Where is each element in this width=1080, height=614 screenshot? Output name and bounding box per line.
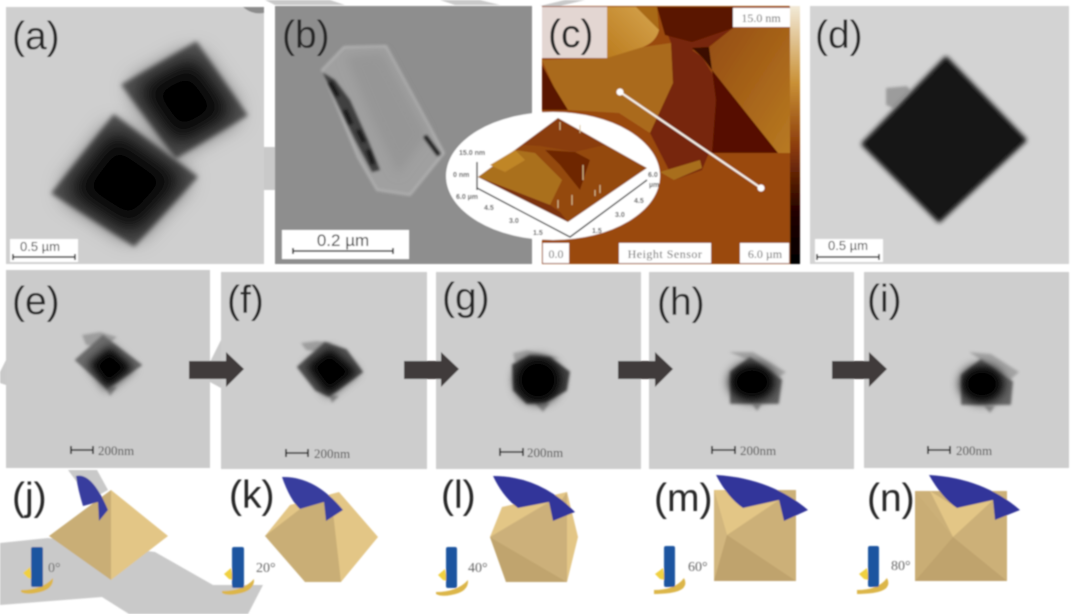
rotation icon k: [222, 547, 254, 595]
inset: 3D AFM surface: [446, 112, 660, 240]
scale bar f: [286, 446, 350, 461]
bottom label height sensor: [619, 243, 711, 263]
label a: (a): [12, 15, 60, 58]
scale bar i: 200nm: [956, 443, 992, 458]
scale bar g: [500, 445, 563, 460]
label k: (k): [229, 474, 274, 517]
arrow f to g: [404, 352, 459, 387]
label n: (n): [867, 477, 915, 520]
arrow g to h: [618, 352, 673, 387]
scale bar h: 200nm: [740, 443, 776, 458]
inset axis labels: 6.0: [648, 172, 658, 179]
inset axis labels: µm: [649, 182, 659, 189]
angle m: 60°: [688, 560, 708, 575]
angle n: 80°: [891, 559, 911, 574]
scale bar e: [71, 443, 134, 458]
label c: (c): [548, 13, 593, 56]
label b: (b): [282, 14, 330, 57]
scale bar a: [10, 239, 78, 262]
inset axes: [477, 162, 647, 237]
label m: (m): [654, 477, 712, 520]
inset axis labels: 4.5: [634, 198, 644, 205]
panel d: TEM of single particle: [810, 6, 1069, 264]
bottom label 0.0: 0.0: [548, 247, 564, 261]
rotation icon n: [857, 546, 888, 594]
inset axis labels: 3.0: [615, 212, 625, 219]
inset axis labels: 0 nm: [453, 172, 469, 179]
panel k: model 20 degrees: [222, 474, 378, 595]
panel f: TEM tilt 20: [221, 272, 427, 469]
inset axis labels: 15.0 nm: [459, 150, 485, 157]
inset axis labels: 3.0: [509, 218, 519, 225]
scale bar e: 200nm: [98, 443, 134, 458]
angle l: 40°: [468, 561, 488, 576]
background: gray watermark shapes: [0, 0, 585, 614]
inset axis labels: 6.0 µm: [456, 194, 478, 201]
panel g: TEM tilt 40: [436, 272, 641, 469]
label g: (g): [442, 276, 490, 319]
rotation icon l: [436, 547, 468, 596]
panel l: model 40 degrees: [436, 474, 578, 596]
arrow h to i: [832, 352, 887, 387]
panel n: model 80 degrees: [857, 475, 1020, 594]
bottom label 6.0 um: [740, 243, 789, 263]
scale bar b: [282, 230, 409, 259]
panel c: AFM height map: [542, 6, 800, 264]
scale bar f: 200nm: [314, 446, 350, 461]
scale bar d: 0.5 µm: [828, 238, 868, 253]
label d: (d): [815, 14, 863, 57]
inset axis labels: 4.5: [484, 205, 494, 212]
angle j: 0°: [48, 561, 61, 576]
label e: (e): [12, 280, 60, 323]
panel e: TEM tilt 0: [6, 270, 210, 468]
bottom label 6.0 um: 6.0 µm: [748, 247, 783, 261]
inset axis labels: 1.5: [592, 228, 602, 235]
scale bar i: [928, 443, 992, 458]
scale bar d: [815, 238, 883, 262]
panel a: TEM of two particles: [6, 7, 264, 264]
panel m: model 60 degrees: [654, 475, 808, 594]
height scale label: [733, 8, 790, 27]
scale bar h: [712, 443, 776, 458]
profile line: [616, 88, 764, 192]
label f: (f): [227, 279, 264, 322]
panel j: model 0 degrees: [12, 476, 168, 594]
label c: [542, 7, 607, 58]
scale bar g: 200nm: [527, 445, 563, 460]
angle k: 20°: [256, 561, 276, 576]
label j: (j): [12, 476, 47, 519]
arrow e to f: [189, 352, 244, 387]
scale bar b: 0.2 µm: [317, 231, 369, 250]
colour scale: [790, 6, 800, 264]
scale bar a: 0.5 µm: [20, 239, 60, 254]
label l: (l): [441, 474, 476, 517]
label h: (h): [657, 281, 705, 324]
inset axis labels: 1.5: [533, 230, 543, 237]
rotation icon j: [21, 547, 53, 594]
label i: (i): [867, 278, 902, 321]
inset axis labels: [453, 150, 659, 237]
bottom label 0.0: [543, 243, 569, 263]
bottom label height sensor: Height Sensor: [628, 247, 702, 261]
rotation icon m: [654, 546, 685, 594]
panel h: TEM tilt 60: [649, 272, 854, 469]
panel b: TEM of thin flake: [275, 6, 532, 264]
height scale label: 15.0 nm: [741, 11, 781, 25]
panel i: TEM tilt 80: [864, 272, 1069, 468]
